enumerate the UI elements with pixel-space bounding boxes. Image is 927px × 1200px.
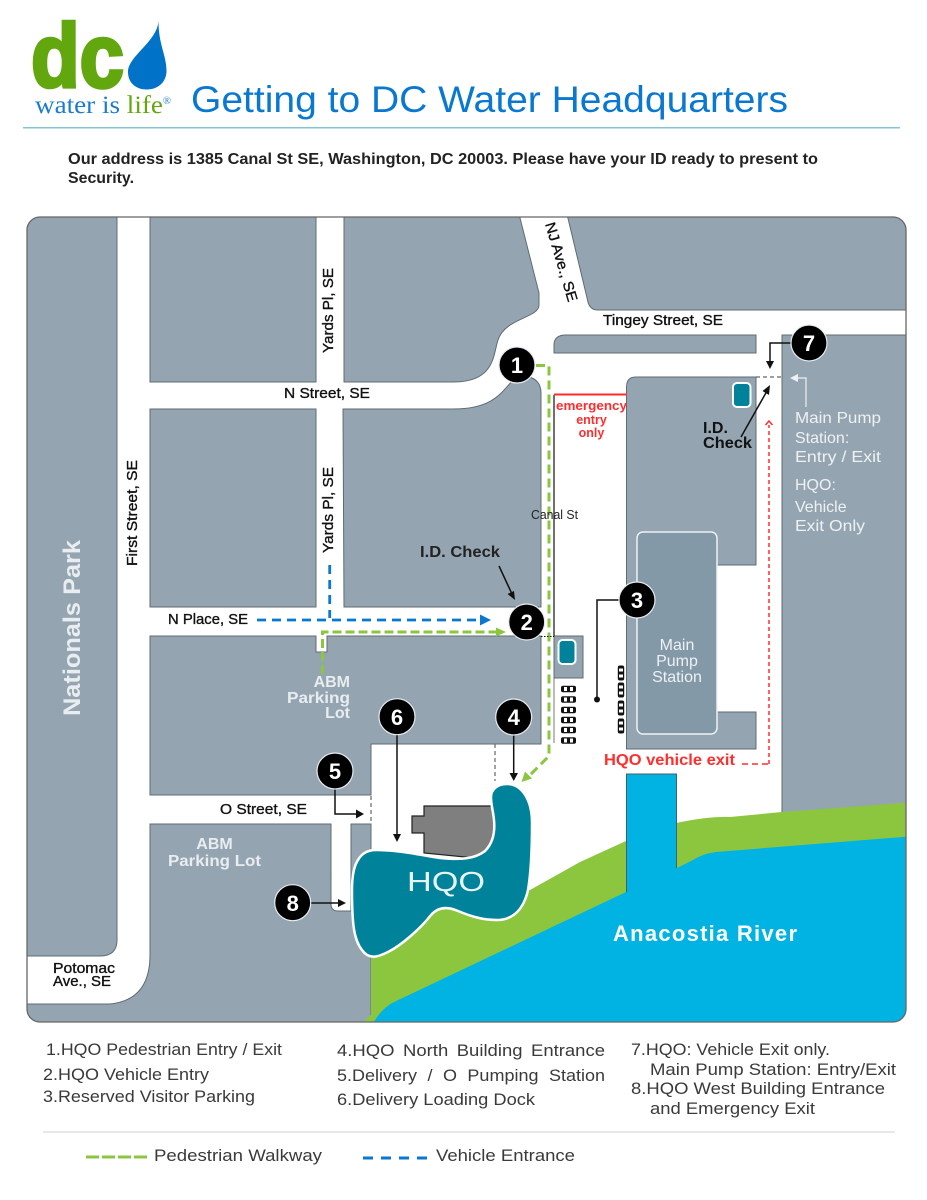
marker 7 <box>791 325 827 361</box>
arrow: marker 7 <box>766 343 792 369</box>
block: pump station grounds <box>626 377 756 749</box>
arrow: white to gate <box>790 374 806 407</box>
Main Pump side note: Main Pump <box>795 410 881 427</box>
block: Tingey island <box>554 335 756 353</box>
address text: Our address is 1385 Canal St SE, Washington, DC 20003. Please have your ID ready to present to <box>68 151 818 168</box>
street labels <box>53 221 723 990</box>
Main Pump Station building: Pump <box>656 653 698 670</box>
key: column 1: 2.HQO Vehicle Entry <box>43 1066 210 1084</box>
HQO label: HQO <box>407 866 485 897</box>
Main Pump Station building: Station <box>652 669 702 686</box>
key: column 3 <box>631 1041 896 1118</box>
Canal St label: Canal St <box>531 508 579 522</box>
key: column 1: 3.Reserved Visitor Parking <box>43 1088 255 1106</box>
parking edge <box>554 678 555 743</box>
ABM parking label: south: ABM <box>196 836 233 853</box>
marker 4 <box>496 699 532 735</box>
arrow: I.D. check north <box>741 385 770 437</box>
street labels: Potomac <box>53 961 115 977</box>
ABM parking label: south: Parking Lot <box>168 853 262 870</box>
pedestrian walkway: north <box>522 366 549 782</box>
key: column 3: 8.HQO West Building Entrance <box>631 1080 885 1098</box>
I.D. Check label: north <box>703 420 752 452</box>
map panel <box>20 210 915 1030</box>
block: west <box>150 409 316 607</box>
channel edge <box>626 774 676 892</box>
logo: DC Water <box>31 7 171 119</box>
Main Pump side note: Station: <box>795 430 849 447</box>
gate dashes <box>371 377 782 824</box>
emergency entry line <box>553 395 555 636</box>
marker 7: 7 <box>803 331 815 356</box>
logo: DC Water: dc <box>31 7 124 107</box>
vehicle entrance route <box>257 565 491 626</box>
pedestrian walkway: N Place <box>322 628 506 674</box>
emergency entry label <box>556 403 627 440</box>
marker 1: 1 <box>511 353 523 378</box>
Main Pump Station building: Main <box>660 637 694 654</box>
legend: vehicle entrance: Vehicle Entrance <box>436 1147 575 1165</box>
arrow: I.D. check south <box>499 566 515 600</box>
ABM parking label: south <box>168 836 262 870</box>
block: centre <box>343 377 541 607</box>
logo: DC Water: water is life <box>35 90 161 119</box>
address text <box>68 151 818 187</box>
marker 2: 2 <box>521 610 533 635</box>
marker 4: 4 <box>508 705 521 730</box>
ABM parking label: north: Lot <box>325 705 351 722</box>
header rule <box>23 127 900 128</box>
map border <box>27 217 906 1022</box>
street labels: N Street, SE <box>284 386 370 402</box>
emergency entry bar <box>554 394 627 396</box>
key: column 3: and Emergency Exit <box>650 1100 815 1118</box>
key: column 3: 7.HQO: Vehicle Exit only. <box>631 1041 830 1059</box>
block: north centre <box>344 210 539 382</box>
street labels: Ave., SE <box>53 974 111 990</box>
ABM parking label: north: ABM <box>314 674 350 691</box>
key: column 3: Main Pump Station: Entry/Exit <box>650 1061 896 1079</box>
block: ABM parking north <box>150 636 541 795</box>
street labels: N Place, SE <box>168 612 248 628</box>
block: north west <box>150 210 316 382</box>
marker 6 <box>379 699 415 735</box>
vehicle exit route <box>742 421 772 764</box>
emergency entry label: emergency <box>556 399 627 413</box>
street labels: Yards Pl, SE <box>321 467 337 553</box>
arrow: marker 5 <box>335 789 364 818</box>
Main Pump Station building <box>637 532 717 734</box>
guard booth: south <box>558 640 576 664</box>
arrow: marker 4 <box>510 735 518 781</box>
street labels: NJ Ave., SE <box>541 221 580 304</box>
street labels: Tingey Street, SE <box>603 313 723 329</box>
I.D. Check label: north: I.D. <box>703 420 728 437</box>
street labels: Yards Pl, SE <box>321 268 337 353</box>
Nationals Park label: Nationals Park <box>59 539 86 716</box>
guard booth: north <box>733 383 750 407</box>
block: north east <box>566 210 915 310</box>
emergency entry label: only <box>579 426 604 440</box>
Anacostia River <box>372 774 915 1026</box>
legend: pedestrian walkway: Pedestrian Walkway <box>154 1147 323 1165</box>
arrow: marker 8 <box>311 899 346 907</box>
ABM parking label: north: Parking <box>287 690 350 707</box>
marker 8 <box>275 885 311 921</box>
HQO vehicle exit label: HQO vehicle exit <box>604 752 735 769</box>
icon: water drop <box>128 21 166 90</box>
marker 2 <box>509 604 545 640</box>
title: Getting to DC Water Headquarters <box>191 78 788 120</box>
Main Pump side note: Vehicle <box>795 499 847 516</box>
Main Pump side note: Exit Only <box>795 518 865 535</box>
block: National Park <box>20 210 117 956</box>
marker 3 <box>619 582 655 618</box>
block: guard block <box>554 636 583 678</box>
marker 1 <box>499 347 535 383</box>
Main Pump side note: HQO: <box>795 477 836 494</box>
footer rule <box>43 1132 895 1133</box>
green shoreline <box>358 802 915 1026</box>
marker 5 <box>317 753 353 789</box>
arrow: marker 6 <box>393 735 401 842</box>
key: column 2: 5.Delivery / O Pumping Station <box>337 1067 605 1085</box>
block: ABM parking south <box>20 824 371 1030</box>
marker 5: 5 <box>329 759 341 784</box>
key: column 2 <box>337 1042 605 1109</box>
arrow: marker 3 <box>594 600 620 702</box>
street labels: O Street, SE <box>220 802 307 818</box>
marker 3: 3 <box>631 588 643 613</box>
marker 6: 6 <box>391 705 403 730</box>
cars: vertical row <box>618 666 624 734</box>
marker 8: 8 <box>287 891 299 916</box>
I.D. Check label: north: Check <box>703 435 752 452</box>
Main Pump side note <box>795 410 882 535</box>
key: column 1: 1.HQO Pedestrian Entry / Exit <box>46 1041 282 1059</box>
I.D. Check label: south: I.D. Check <box>420 544 500 561</box>
logo: DC Water: ® <box>163 96 171 107</box>
key: column 2: 6.Delivery Loading Dock <box>337 1091 536 1109</box>
cars: horizontal row <box>561 686 576 744</box>
ABM parking label: north <box>288 676 350 718</box>
building: grey <box>412 806 495 860</box>
street labels: First Street, SE <box>125 460 141 566</box>
HQO building <box>352 784 532 957</box>
address text: Security. <box>68 170 134 187</box>
emergency entry label: entry <box>576 413 607 427</box>
key: column 1 <box>43 1041 282 1106</box>
block: east <box>782 335 915 815</box>
Anacostia River label: Anacostia River <box>613 921 797 946</box>
vehicle gate dots <box>541 636 554 637</box>
Main Pump side note: Entry / Exit <box>795 449 882 466</box>
key: column 2: 4.HQO North Building Entrance <box>337 1042 605 1060</box>
